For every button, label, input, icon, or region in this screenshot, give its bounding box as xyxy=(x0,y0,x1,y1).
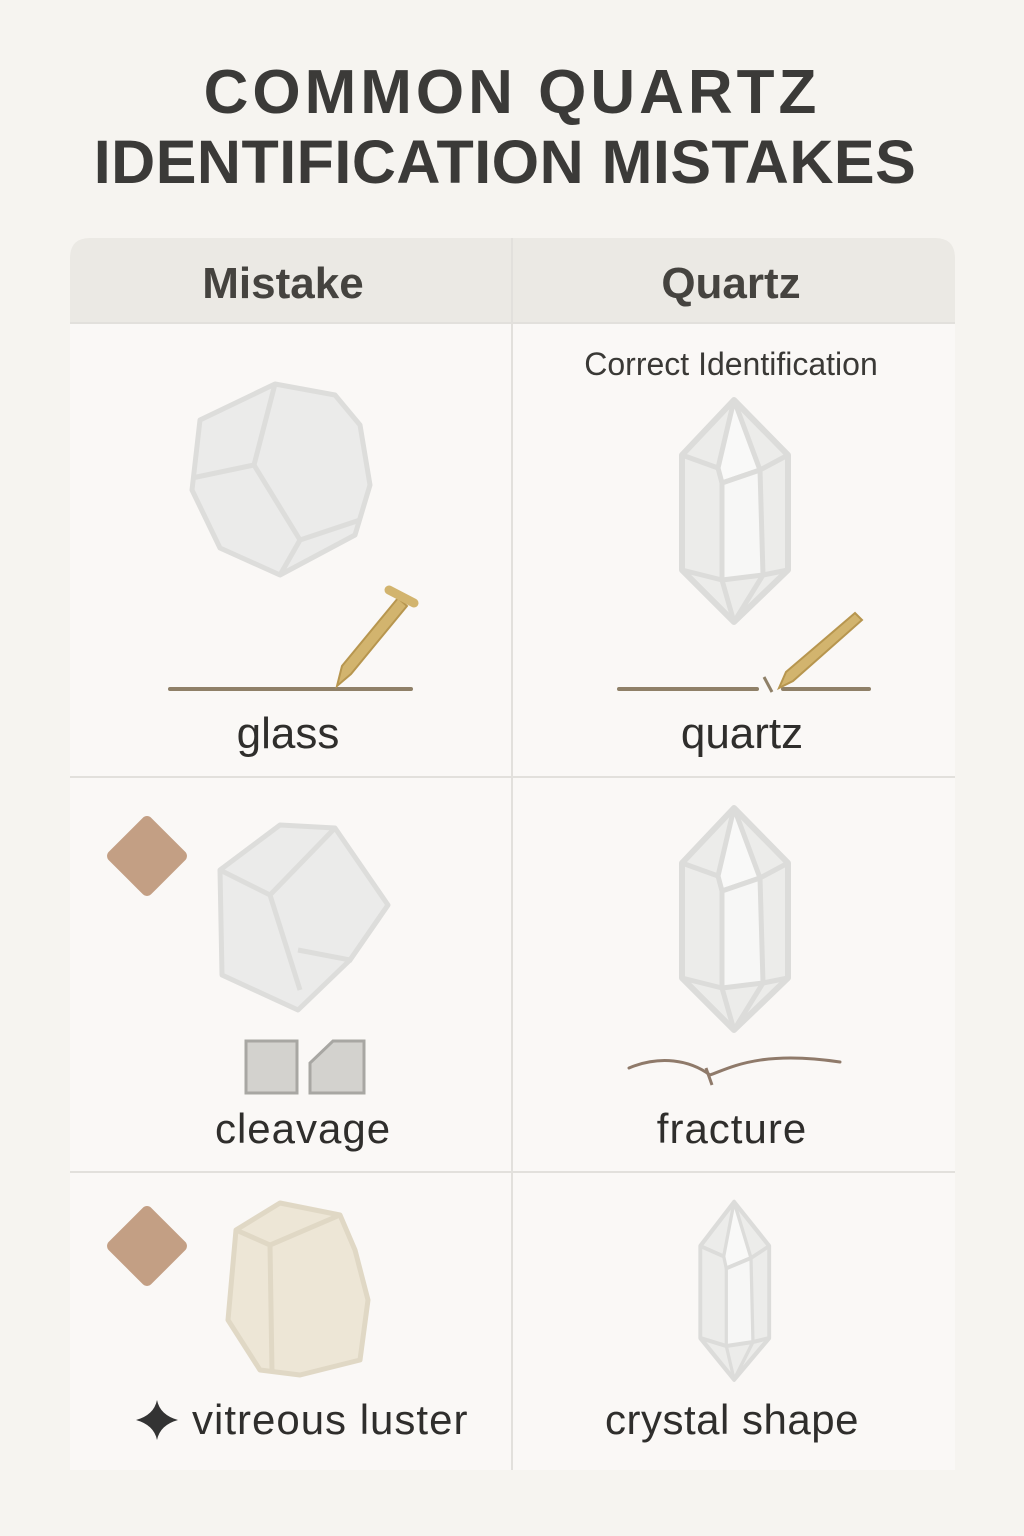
icon: beige polyhedron xyxy=(228,1203,368,1375)
icon: nail scratching xyxy=(170,590,414,689)
icon: sparkle xyxy=(136,1400,178,1440)
row 3 quartz: crystal shape xyxy=(605,1202,859,1443)
row 3 quartz: crystal shape: crystal shape xyxy=(605,1396,859,1443)
icon: fracture line xyxy=(629,1058,840,1075)
row 2 mistake: cleavage: cleavage xyxy=(215,1105,391,1152)
row 1 quartz xyxy=(584,346,878,758)
table header xyxy=(70,238,955,323)
table header: Quartz xyxy=(661,259,801,308)
icon: quartz crystal xyxy=(682,808,788,1030)
row 2 quartz: fracture: fracture xyxy=(657,1105,807,1152)
icon: cleavage blocks xyxy=(246,1041,364,1093)
row 2 mistake: cleavage xyxy=(105,814,391,1152)
icon: nail scratch xyxy=(619,613,869,692)
icon: glass polyhedron xyxy=(192,384,370,575)
table xyxy=(70,238,955,1470)
row 1 mistake: glass xyxy=(170,384,414,758)
row 3 mistake: vitreous luster xyxy=(105,1203,468,1443)
title: IDENTIFICATION MISTAKES xyxy=(94,128,916,196)
title: COMMON QUARTZ xyxy=(204,58,820,127)
row 3 mistake: vitreous luster: vitreous luster xyxy=(192,1396,468,1443)
icon: brown diamond xyxy=(105,814,189,898)
title xyxy=(94,58,916,196)
icon: cleavage polyhedron xyxy=(220,825,388,1010)
row 1 quartz: Correct Identification xyxy=(584,346,878,382)
table header: Mistake xyxy=(202,259,364,308)
row 1 mistake: glass: glass xyxy=(237,709,339,758)
row 1 quartz: quartz xyxy=(681,709,803,758)
icon: quartz crystal xyxy=(682,400,788,622)
row 2 quartz: fracture xyxy=(629,808,840,1152)
icon: brown diamond xyxy=(105,1204,189,1288)
icon: slim quartz crystal xyxy=(700,1202,769,1380)
